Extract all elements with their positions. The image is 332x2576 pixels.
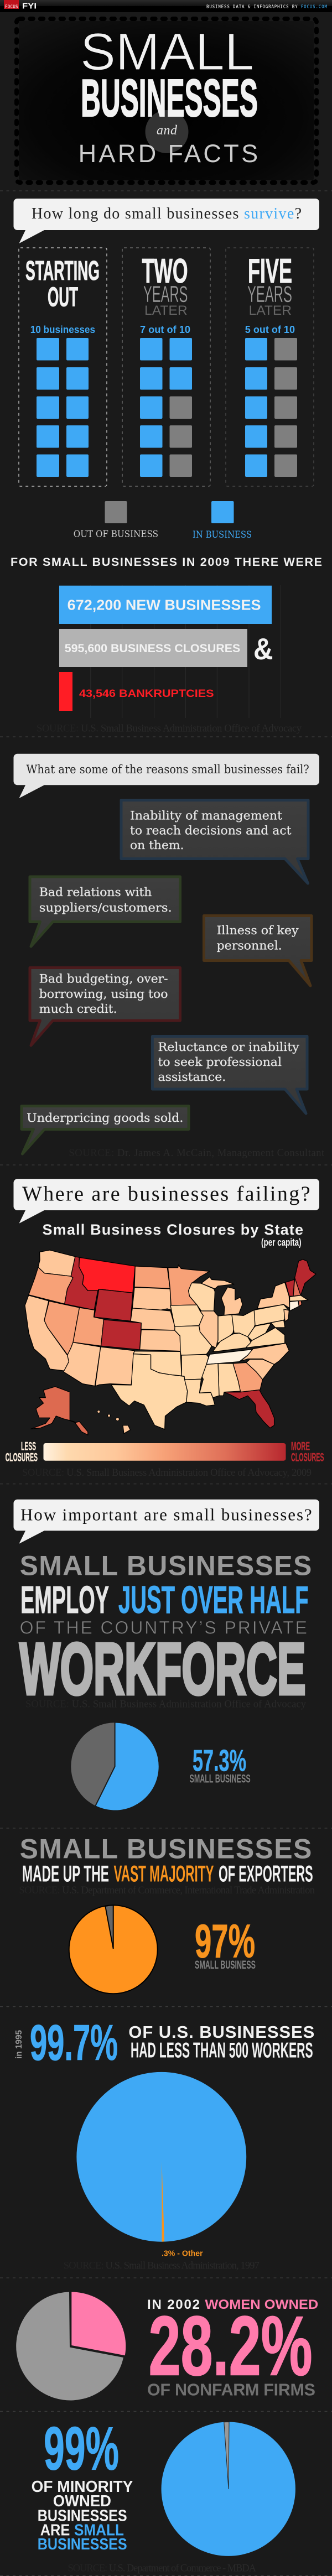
legend: out of business / in business: OUT OF BUSINESS [74,529,158,539]
speech box: bad budgeting: borrowing, using too [39,987,168,1001]
question bubble: reasons [13,754,319,798]
panel: two years later: TWO [142,252,188,290]
map legend: less to more closures: LESS [21,1440,36,1453]
header bar: BUSINESS DATA & INFOGRAPHICS BY FOCUS.COM [206,4,327,9]
question bubble: survive: How long do small businesses survive? [32,205,302,222]
legend: out of business / in business [74,501,252,540]
stat: 97 percent small business: SMALL BUSINESS [195,1959,256,1971]
question bubble: survive [13,199,319,243]
panel: five years later: FIVE [248,252,292,290]
headline: exporters: VAST MAJORITY [114,1861,214,1887]
headline: exporters: SMALL BUSINESSES [20,1833,312,1864]
headline: women owned 28.2 percent: OF NONFARM FIRMS [147,2381,315,2400]
choropleth map of US states [25,1250,316,1435]
headline: minority owned 99 percent: ARE [40,2521,70,2539]
speech box: inability of management [121,800,308,883]
map title: Small Business Closures by State [42,1221,303,1238]
pie chart: 57.3 percent workforce [71,1722,159,1810]
stat: 57.3 percent small business: SMALL BUSINESS [189,1773,251,1786]
headline: minority owned 99 percent: OWNED [53,2492,111,2510]
panel: five years later: YEARS [247,281,292,307]
header bar [0,0,332,12]
headline: women owned 28.2 percent: IN 2002 [147,2297,200,2312]
headline: minority owned 99 percent: OF MINORITY [32,2478,133,2496]
pie chart: 99.7 percent [76,2072,246,2242]
speech box: illness of key personnel: personnel. [217,939,282,953]
map title [42,1221,303,1248]
panel: five years later: LATER [249,304,292,318]
stat: 57.3 percent small business: 57.3% [193,1744,246,1778]
source note: SOURCE: U.S. Department of Commerce, International Trade Administration [19,1885,315,1896]
title panel: SMALL [80,23,254,81]
speech box: reluctance to seek assistance: assistance. [158,1070,226,1084]
source note: SOURCE: U.S. Small Business Administration Office of Advocacy [37,724,302,735]
headline: exporters: MADE UP THE [22,1861,109,1887]
source note: SOURCE: U.S. Small Business Administration Office of Advocacy, 2009 [22,1467,312,1479]
bar chart: 2009 business counts: 43,546 BANKRUPTCIES [79,688,214,700]
speech box: reluctance to seek assistance: Reluctance or inability [158,1040,300,1054]
headline: employ just over half of workforce: EMPLOY [20,1578,109,1621]
question bubble: where: Where are businesses failing? [22,1183,310,1206]
question bubble: importance: How important are small businesses? [20,1505,312,1524]
map legend: less to more closures [6,1440,324,1464]
legend: out of business / in business: IN BUSINESS [193,529,252,540]
speech box: illness of key personnel: Illness of key [217,924,299,938]
headline: 99.7 percent under 500 workers: in 1995 [14,2030,24,2059]
speech box: bad relations [30,877,180,946]
title panel [17,19,317,183]
speech box: inability of management: to reach decisions and act [130,824,292,837]
speech box: bad budgeting: much credit. [39,1002,117,1016]
headline: minority owned 99 percent: BUSINESSES [38,2536,127,2553]
stat: 97 percent small business: 97% [195,1915,255,1968]
panel: starting out [19,248,107,486]
title panel: and [157,123,178,138]
bar chart: 2009 business counts [59,585,281,718]
speech box: inability of management: Inability of management [130,809,282,823]
speech box: bad relations: suppliers/customers. [39,901,172,915]
headline: minority owned 99 percent: 99% [44,2415,119,2483]
header bar: FOCUS [5,4,18,9]
panel: two years later: YEARS [143,281,188,307]
stat: 97 percent small business [195,1915,256,1971]
headline: 99.7 percent under 500 workers [14,2015,314,2071]
panel: starting out: STARTING [25,256,100,286]
headline: minority owned 99 percent: SMALL [74,2521,124,2539]
source note: SOURCE: U.S. Department of Commerce - MBDA [68,2563,257,2574]
source note: SOURCE: Dr. James A. McCain, Management Consultant [69,1148,325,1159]
pie chart: women owned 28.2 percent [16,2292,126,2400]
panel: starting out: OUT [48,282,78,312]
panel: five years later: 5 out of 10 [245,324,295,335]
bar chart: 2009 business counts: 595,600 BUSINESS CLOSURES [65,642,240,655]
speech box: illness of key personnel [204,916,312,986]
label: other share: .3% - Other [162,2249,203,2258]
panel: starting out: 10 businesses [30,324,95,335]
headline: exporters [20,1833,313,1887]
heading: small businesses in 2009: FOR SMALL BUSINESSES IN 2009 THERE WERE [11,555,322,569]
bar chart: 2009 business counts: & [253,632,273,666]
headline: 99.7 percent under 500 workers: 99.7% [30,2015,118,2071]
panel: two years later: 7 out of 10 [140,324,190,335]
headline: 99.7 percent under 500 workers: OF U.S. BUSINESSES [128,2022,314,2042]
panel: two years later: LATER [144,304,188,318]
source note: SOURCE: U.S. Small Business Administration, 1997 [64,2261,260,2272]
speech box: underpricing [22,1106,189,1154]
header bar: FYI [22,1,37,11]
question bubble: where [13,1179,319,1224]
stat: 57.3 percent small business [189,1744,251,1786]
bar chart: 2009 business counts: 672,200 NEW BUSINESSES [68,598,261,613]
headline: employ just over half of workforce [20,1550,312,1709]
speech box: reluctance to seek assistance [152,1037,307,1113]
headline: minority owned 99 percent: BUSINESSES [38,2507,127,2525]
source note: SOURCE: U.S. Small Business Administration Office of Advocacy [25,1699,307,1710]
headline: women owned 28.2 percent: WOMEN OWNED [205,2297,318,2312]
panel: two years later [122,248,210,486]
map legend: less to more closures: CLOSURES [6,1451,38,1464]
pie chart: 97 percent exporters [69,1905,158,1994]
headline: minority owned 99 percent [32,2415,133,2553]
title panel: HARD FACTS [79,139,258,168]
speech box: underpricing: Underpricing goods sold. [27,1111,183,1125]
headline: employ just over half of workforce: SMALL BUSINESSES [20,1550,312,1581]
speech box: bad budgeting [30,968,180,1045]
speech box: bad budgeting: Bad budgeting, over- [39,972,168,986]
panel: five years later [226,248,314,486]
map legend: less to more closures: MORE [291,1440,310,1453]
question bubble: importance [13,1500,319,1544]
speech box: bad relations: Bad relations with [39,886,152,899]
pie chart: minority owned 99 percent [162,2422,295,2556]
speech box: inability of management: on them. [130,839,184,852]
speech box: reluctance to seek assistance: to seek professional [158,1055,282,1069]
headline: employ just over half of workforce: OF THE COUNTRY’S PRIVATE [20,1617,307,1637]
map title: (per capita) [261,1237,302,1248]
question bubble: reasons: What are some of the reasons small businesses fail? [27,763,309,776]
